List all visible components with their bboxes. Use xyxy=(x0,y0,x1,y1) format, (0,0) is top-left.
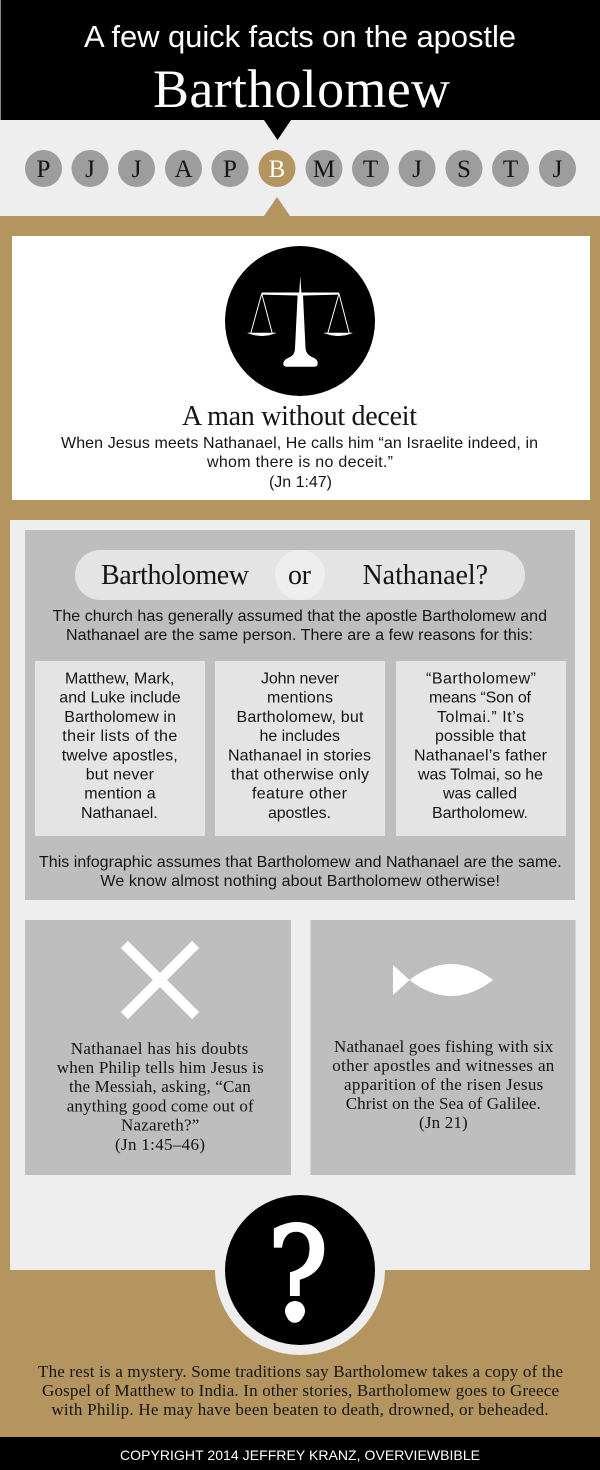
apostle initials xyxy=(25,150,576,187)
apostle initials: J xyxy=(553,156,563,183)
icon: question mark badge xyxy=(215,1185,385,1355)
card: synoptic lists: mention a xyxy=(84,786,156,803)
pill heading: Bartholomew xyxy=(101,560,250,591)
text: intro: Nathanael are the same person. There are a few reasons for this: xyxy=(66,627,533,644)
card: synoptic lists: twelve apostles, xyxy=(62,747,178,764)
panel: Bartholomew or Nathanael xyxy=(25,530,575,900)
pointer: header down arrow xyxy=(264,120,291,140)
text: fishing: Christ on the Sea of Galilee. xyxy=(346,1094,541,1113)
panel: fishing xyxy=(310,920,576,1175)
card: John never mentions: John never xyxy=(261,670,340,688)
apostle initials: A xyxy=(174,156,193,183)
text: assumption note: We know almost nothing about Bartholomew otherwise! xyxy=(100,873,500,890)
card: son of Tolmai: was called xyxy=(442,786,517,803)
pointer: gold up arrow xyxy=(264,197,290,216)
card: synoptic lists: their lists of the xyxy=(62,728,177,745)
card: John never mentions: he includes xyxy=(260,728,340,745)
text: assumption note: This infographic assumes that Bartholomew and Nathanael are the same. xyxy=(39,854,562,871)
card: synoptic lists: Bartholomew in xyxy=(64,709,176,726)
card: John never mentions: Bartholomew, but xyxy=(236,709,364,726)
pill heading: Nathanael? xyxy=(362,560,488,591)
apostle initials: S xyxy=(457,156,471,183)
apostle initials: T xyxy=(503,156,518,183)
card: son of Tolmai: Nathanael’s father xyxy=(414,747,548,764)
card: son of Tolmai: Bartholomew. xyxy=(432,805,528,822)
apostle initials: P xyxy=(37,156,50,183)
apostle navigation strip xyxy=(0,120,600,216)
header banner xyxy=(0,0,600,120)
text: the rest is a mystery: with Philip. He may have been beaten to death, drowned, or beheaded. xyxy=(51,1400,549,1419)
text: intro xyxy=(52,608,547,644)
panel: doubts xyxy=(25,920,291,1175)
icon: X xyxy=(124,944,196,1016)
text: deceit description xyxy=(61,435,538,491)
pill heading xyxy=(75,550,525,600)
card: son of Tolmai: Tolmai.” It’s xyxy=(437,709,524,726)
card: synoptic lists xyxy=(35,661,205,836)
card: synoptic lists: Nathanael. xyxy=(81,805,158,822)
text: the rest is a mystery: Gospel of Matthew to India. In other stories, Bartholomew goes to Greece xyxy=(42,1381,559,1400)
text: the rest is a mystery: The rest is a mystery. Some traditions say Bartholomew takes a copy of the xyxy=(38,1362,563,1381)
text: doubts: the Messiah, asking, “Can xyxy=(69,1077,251,1096)
text: deceit description: whom there is no deceit.” xyxy=(206,454,393,471)
card: son of Tolmai: “Bartholomew” xyxy=(426,670,536,688)
apostle initials: B xyxy=(269,156,285,183)
header subtitle: A few quick facts on the apostle xyxy=(84,19,516,54)
title: Bartholomew: Bartholomew xyxy=(153,59,450,119)
panel: a man without deceit xyxy=(12,236,590,500)
card: son of Tolmai: possible that xyxy=(435,728,527,745)
text: fishing: apparition of the risen Jesus xyxy=(344,1075,543,1094)
footer: copyright: COPYRIGHT 2014 JEFFREY KRANZ, OVERVIEWBIBLE xyxy=(120,1447,480,1463)
card: son of Tolmai: was Tolmai, so he xyxy=(417,766,543,784)
icon: scales in black circle xyxy=(225,246,375,396)
text: fishing: other apostles and witnesses an xyxy=(332,1056,555,1075)
heading: a man without deceit: A man without deceit xyxy=(182,401,417,432)
card: John never mentions: mentions xyxy=(267,690,333,707)
text: deceit description: (Jn 1:47) xyxy=(269,474,332,491)
text: deceit description: When Jesus meets Nathanael, He calls him “an Israelite indeed, in xyxy=(61,435,538,452)
icon: fish xyxy=(393,964,493,996)
card: John never mentions: Nathanael in stories xyxy=(228,747,371,764)
card: John never mentions xyxy=(215,661,385,836)
text: doubts: anything good come out of xyxy=(67,1096,254,1116)
text: doubts: Nathanael has his doubts xyxy=(71,1039,248,1058)
text: doubts: Nazareth?” xyxy=(121,1116,199,1134)
text: doubts: when Philip tells him Jesus is xyxy=(57,1058,264,1077)
card: synoptic lists: but never xyxy=(86,766,155,784)
text: doubts: (Jn 1:45–46) xyxy=(115,1135,205,1154)
card: son of Tolmai: means “Son of xyxy=(429,690,532,707)
icon: question mark badge: ? xyxy=(268,1201,328,1350)
apostle initials: J xyxy=(85,156,95,183)
text: the rest is a mystery xyxy=(38,1362,563,1419)
text: fishing: Nathanael goes fishing with six xyxy=(334,1037,554,1056)
pill heading: or xyxy=(288,560,312,591)
apostle initials: J xyxy=(412,156,422,183)
card: synoptic lists: and Luke include xyxy=(59,690,181,707)
text: fishing: (Jn 21) xyxy=(419,1113,468,1132)
card: son of Tolmai xyxy=(396,661,566,836)
panel: light background xyxy=(10,520,590,1270)
apostle initials: T xyxy=(363,156,378,183)
footer: copyright xyxy=(0,1437,600,1470)
card: John never mentions: that otherwise only xyxy=(231,766,369,784)
apostle initials: P xyxy=(223,156,237,183)
text: doubts xyxy=(57,1039,264,1154)
card: John never mentions: feature other xyxy=(252,786,348,803)
card: synoptic lists: Matthew, Mark, xyxy=(65,670,174,688)
apostle initials: M xyxy=(313,156,335,183)
card: John never mentions: apostles. xyxy=(268,805,331,822)
text: fishing xyxy=(332,1037,555,1132)
text: assumption note xyxy=(39,854,562,890)
text: intro: The church has generally assumed that the apostle Bartholomew and xyxy=(52,608,547,625)
apostle initials: J xyxy=(132,156,142,183)
